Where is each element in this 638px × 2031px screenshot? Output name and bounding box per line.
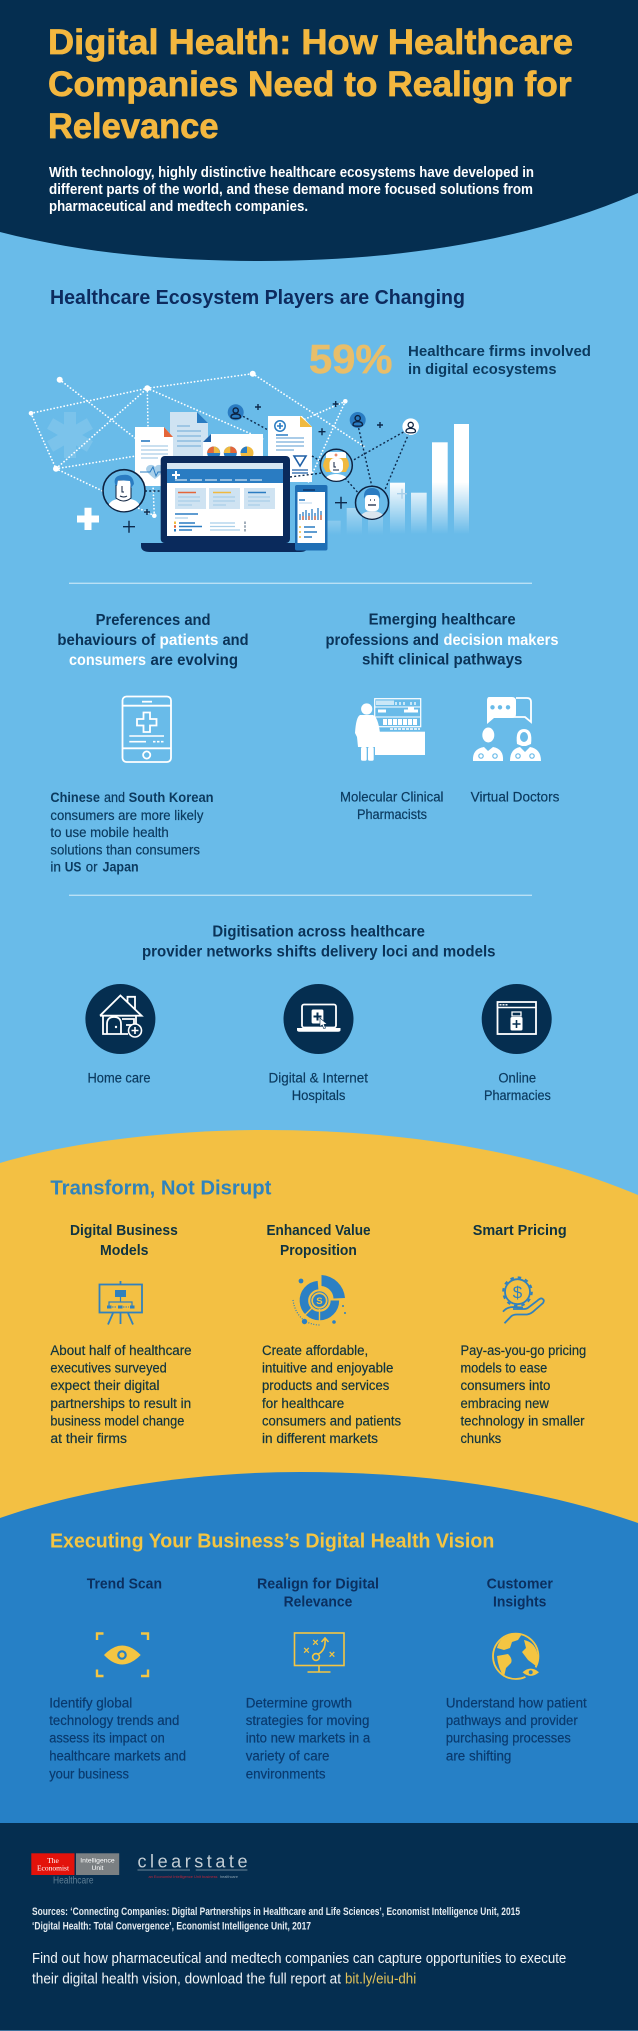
body text — [262, 1343, 401, 1446]
panel: digitisation across provider networks — [85, 924, 552, 1103]
logo: The Economist Intelligence Unit Healthcare — [31, 1853, 119, 1886]
icon: presentation board — [100, 1281, 142, 1324]
heading: digitisation: Digitisation across healthcare — [212, 924, 425, 941]
text: mobile health: to use mobile health — [50, 825, 169, 840]
divider — [69, 895, 532, 896]
body text: technology in smaller — [460, 1414, 585, 1429]
title: Digital Health: How Healthcare — [48, 23, 573, 62]
heading: ecosystem players: Healthcare Ecosystem Players are Changing — [50, 286, 465, 309]
body text: Create affordable, — [262, 1343, 368, 1358]
heading: digitisation — [142, 924, 496, 961]
call to action: their digital health vision, download the full report at — [32, 1970, 342, 1987]
dark connection lines — [145, 412, 411, 495]
subheading: Enhanced Value — [266, 1222, 371, 1239]
title: Relevance — [48, 107, 218, 146]
subheading — [266, 1222, 371, 1259]
body text — [50, 1343, 192, 1446]
icon: virtual doctors — [473, 697, 541, 761]
text: mobile health: consumers are more likely — [50, 808, 204, 823]
body text: products and services — [262, 1378, 390, 1393]
label: home care: Home care — [88, 1070, 150, 1085]
text: mobile health: US — [65, 860, 81, 875]
icon: value donut: S — [316, 1296, 323, 1307]
subheading — [257, 1575, 379, 1611]
subheading: Digital Business — [70, 1222, 178, 1239]
document: light blue — [170, 412, 208, 460]
blue curved background — [0, 1472, 638, 1830]
body text: business model change — [50, 1414, 184, 1429]
document: clinical record — [268, 416, 312, 482]
intro text: With technology, highly distinctive healthcare ecosystems have developed in — [49, 165, 534, 181]
call to action — [32, 1950, 566, 1987]
heading: transform: Transform, Not Disrupt — [50, 1176, 272, 1199]
subheading — [70, 1222, 178, 1259]
intro text — [49, 165, 534, 215]
avatar: patient — [103, 470, 145, 512]
subheading: Trend Scan — [87, 1575, 162, 1592]
label: digital and internet hospitals: Digital & Internet — [268, 1070, 368, 1085]
intro text: different parts of the world, and these demand more focused solutions from — [49, 182, 533, 198]
divider — [69, 583, 532, 584]
column: customer insights — [446, 1575, 587, 1763]
icon: strategy monitor — [294, 1633, 344, 1672]
logo: The Economist Intelligence Unit Healthcare: The — [47, 1856, 59, 1865]
call to action: Find out how pharmaceutical and medtech companies can capture opportunities to execute — [32, 1950, 566, 1967]
heading: preferences: are evolving — [150, 652, 238, 669]
text: mobile health: Chinese — [50, 790, 100, 805]
label: online pharmacies: Online — [498, 1070, 536, 1085]
body text: strategies for moving — [246, 1713, 369, 1728]
laptop screen — [167, 463, 283, 536]
body text — [49, 1695, 186, 1781]
laptop — [141, 456, 308, 552]
icon: dollar in hand: $ — [513, 1283, 523, 1302]
body text: assess its impact on — [49, 1731, 165, 1746]
heading: preferences: behaviours of — [57, 632, 156, 649]
icon: eye scan — [97, 1634, 148, 1676]
icon: digital hospital laptop — [284, 984, 354, 1054]
label: online pharmacies: Pharmacies — [484, 1088, 551, 1103]
yellow curved background — [0, 1130, 638, 1530]
icon: pharmacist — [355, 699, 425, 761]
heading: emerging professions: shift clinical pathways — [362, 652, 522, 668]
icon: mobile health phone — [122, 696, 171, 762]
panel: header — [0, 0, 638, 261]
stat label — [408, 343, 591, 378]
subheading: Relevance — [284, 1594, 352, 1611]
logo: clearstate: healthcare — [220, 1875, 238, 1879]
text: mobile health: in — [50, 860, 61, 875]
icon: strategy monitor: × — [303, 1645, 310, 1657]
heading: emerging professions — [326, 612, 558, 668]
title — [48, 23, 573, 146]
label: molecular clinical pharmacists: Pharmacists — [357, 807, 427, 822]
body text: consumers and patients — [262, 1414, 401, 1429]
stat: 59 percent — [309, 336, 591, 382]
header curved background — [0, 0, 638, 261]
body text: are shifting — [446, 1748, 511, 1763]
logo: The Economist Intelligence Unit Healthcare: Unit — [91, 1865, 104, 1872]
label: digital and internet hospitals: Hospitals — [292, 1088, 346, 1103]
document: heart rate — [135, 427, 173, 486]
label: virtual doctors: Virtual Doctors — [471, 790, 560, 805]
document: pie charts — [203, 434, 263, 462]
heading: emerging professions: Emerging healthcare — [369, 612, 516, 628]
heading: preferences: consumers — [69, 652, 146, 669]
body text: Understand how patient — [446, 1695, 587, 1710]
body text: consumers into — [460, 1378, 550, 1393]
network nodes — [29, 371, 348, 518]
logo: The Economist Intelligence Unit Healthcare: Economist — [37, 1864, 70, 1872]
subheading: Customer — [487, 1575, 553, 1592]
body text: purchasing processes — [446, 1731, 571, 1746]
text: mobile health: or — [86, 860, 98, 875]
heading: emerging professions: professions and — [326, 632, 439, 649]
label: digital and internet hospitals — [268, 1070, 368, 1103]
body text: Identify global — [49, 1695, 132, 1710]
icon: strategy monitor: × — [329, 1649, 335, 1661]
logo: clearstate: clearstate — [138, 1852, 248, 1872]
panel: footer — [0, 1823, 638, 2031]
panel: transform not disrupt — [0, 1130, 638, 1530]
stat label: Healthcare firms involved — [408, 343, 591, 360]
icon: globe with eye — [493, 1634, 539, 1679]
body text: technology trends and — [49, 1713, 179, 1728]
subheading: Models — [100, 1242, 148, 1259]
subheading: Insights — [493, 1594, 546, 1611]
text: mobile health: South Korean — [129, 790, 214, 805]
column: realign for digital relevance — [246, 1575, 379, 1781]
body text: environments — [246, 1766, 326, 1781]
heading: executing: Executing Your Business’s Digital Health Vision — [50, 1530, 494, 1553]
panel: professions and decision makers — [326, 612, 560, 822]
sources: ‘Digital Health: Total Convergence’, Economist Intelligence Unit, 2017 — [32, 1921, 311, 1933]
body text: Determine growth — [246, 1695, 352, 1710]
heading: preferences: Preferences and — [96, 612, 211, 629]
small user icons — [228, 404, 419, 435]
tiny faded plus — [397, 489, 407, 499]
heading: emerging professions: decision makers — [444, 632, 558, 649]
body text — [446, 1695, 587, 1763]
column: smart pricing — [460, 1222, 586, 1446]
bottom edge line — [0, 2030, 638, 2031]
fading bar chart — [325, 424, 469, 536]
icon: strategy monitor: × — [312, 1637, 319, 1649]
illustration: connected digital health ecosystem — [29, 371, 469, 552]
body text: expect their digital — [50, 1378, 160, 1393]
text: mobile health: Japan — [102, 860, 139, 875]
text: mobile health: solutions than consumers — [50, 842, 200, 858]
avatar: nurse — [320, 449, 352, 484]
footer background — [0, 1823, 638, 2031]
heading: digitisation: provider networks shifts delivery loci and models — [142, 944, 496, 961]
panel: patients and consumers — [50, 612, 249, 875]
body text: chunks — [460, 1431, 501, 1446]
body text: executives surveyed — [50, 1361, 167, 1376]
heading: preferences — [57, 612, 249, 669]
logo: The Economist Intelligence Unit Healthcare: Healthcare — [53, 1875, 94, 1886]
logo: The Economist Intelligence Unit Healthcare: Intelligence — [80, 1858, 115, 1864]
phone — [295, 485, 328, 550]
body text: partnerships to result in — [50, 1396, 191, 1411]
column: trend scan — [49, 1575, 186, 1781]
heading: preferences: and — [222, 632, 248, 649]
logo: clearstate: an Economist Intelligence Unit business — [148, 1875, 218, 1879]
stat number: 59% — [309, 336, 392, 382]
label: online pharmacies — [484, 1070, 551, 1103]
text: mobile health: and — [104, 790, 125, 805]
avatar: doctor — [356, 486, 388, 522]
sources — [32, 1906, 520, 1933]
heading: preferences: patients — [160, 632, 218, 649]
body text — [246, 1695, 371, 1781]
subheading: Smart Pricing — [473, 1222, 567, 1239]
body text: for healthcare — [262, 1396, 344, 1411]
body text: at their firms — [50, 1431, 127, 1446]
body text: Pay-as-you-go pricing — [460, 1343, 586, 1358]
body text: variety of care — [246, 1748, 330, 1763]
subheading — [487, 1575, 553, 1611]
network lines — [31, 374, 365, 516]
body text: into new markets in a — [246, 1731, 371, 1746]
stat label: in digital ecosystems — [408, 361, 556, 378]
body text: in different markets — [262, 1431, 378, 1446]
icon: home care — [85, 984, 155, 1054]
body text: pathways and provider — [446, 1713, 578, 1728]
panel: executing your business's vision — [0, 1472, 638, 1830]
label: molecular clinical pharmacists — [340, 790, 444, 822]
subheading: Realign for Digital — [257, 1575, 379, 1592]
panel: light blue background — [0, 0, 638, 1200]
body text — [460, 1343, 586, 1446]
big white plus — [77, 508, 99, 530]
icon: online pharmacy — [482, 984, 552, 1054]
body text: your business — [49, 1766, 129, 1781]
body text: intuitive and enjoyable — [262, 1361, 393, 1376]
call to action: bit.ly/eiu-dhi — [345, 1970, 416, 1987]
plus signs — [123, 401, 383, 533]
body text: healthcare markets and — [49, 1748, 186, 1763]
text: mobile health — [50, 790, 214, 875]
body text: embracing new — [460, 1396, 549, 1411]
icon: dollar in hand — [503, 1277, 544, 1323]
body text: models to ease — [460, 1361, 547, 1376]
subheading: Proposition — [280, 1242, 357, 1259]
body text: About half of healthcare — [50, 1343, 192, 1358]
column: enhanced value proposition — [262, 1222, 401, 1446]
column: digital business models — [50, 1222, 192, 1446]
label: molecular clinical pharmacists: Molecular Clinical — [340, 790, 444, 805]
faded asterisk — [47, 412, 93, 458]
title: Companies Need to Realign for — [48, 65, 572, 104]
intro text: pharmaceutical and medtech companies. — [49, 199, 308, 215]
icon: value donut — [293, 1275, 346, 1325]
